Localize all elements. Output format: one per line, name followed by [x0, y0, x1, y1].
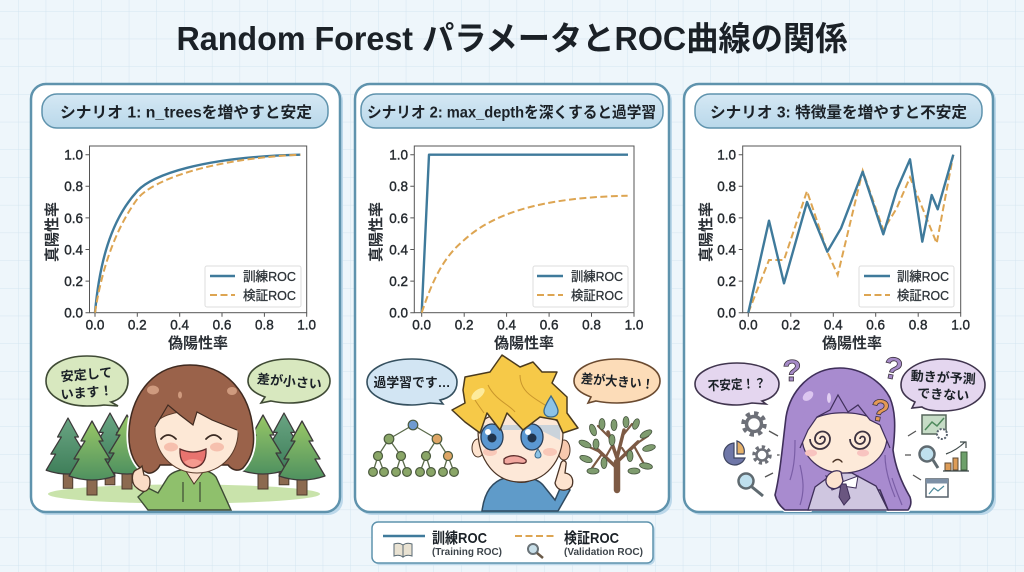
heading: scenario 2 [361, 94, 663, 128]
panel: scenario 2 [355, 84, 672, 515]
speech bubble: small gap [248, 359, 330, 403]
bottom legend: 訓練ROC [432, 530, 487, 547]
chart: scenario 1 ROC curves [43, 146, 316, 352]
chart legend [859, 266, 954, 307]
chart: scenario 1 ROC curves: 0.8 [64, 179, 83, 194]
chart: scenario 3 ROC curves: 0.2 [717, 274, 736, 289]
icon: gear large [744, 414, 764, 434]
chart: scenario 2 ROC curves: 0.8 [582, 318, 601, 332]
chart legend: 訓練ROC [243, 269, 296, 284]
chart legend: 検証ROC [243, 288, 296, 303]
chart: scenario 3 ROC curves: 0.0 [717, 306, 736, 320]
speech bubble: stable: 安定して [60, 365, 113, 384]
validation curve [422, 196, 628, 313]
chart legend [205, 266, 301, 307]
chart: scenario 1 ROC curves: 0.0 [64, 306, 83, 320]
icon: line chart with gear [922, 415, 947, 439]
character: worried blond boy [452, 355, 578, 511]
tree [69, 421, 115, 495]
chart: scenario 1 ROC curves: 0.4 [64, 242, 83, 258]
icon: sweat drop [544, 396, 558, 417]
chart legend: 訓練ROC [897, 269, 949, 284]
chart: scenario 1 ROC curves: 0.2 [128, 318, 147, 332]
speech bubble: large gap: 差が大きい！ [580, 371, 654, 392]
speech bubble: stable: います！ [60, 383, 113, 402]
speech bubble: overfitting: 過学習です… [374, 375, 450, 390]
validation curve [95, 155, 300, 313]
chart: scenario 3 ROC curves: 0.2 [781, 318, 800, 332]
chart: scenario 2 ROC curves: 0.0 [389, 306, 408, 320]
chart: scenario 3 ROC curves: 0.8 [909, 318, 928, 332]
chart: scenario 2 ROC curves: 真陽性率 [367, 202, 385, 262]
chart: scenario 1 ROC curves: 偽陽性率 [168, 334, 228, 352]
training curve [748, 155, 953, 313]
chart: scenario 3 ROC curves: 0.6 [717, 211, 736, 226]
chart: scenario 3 ROC curves: 0.4 [824, 318, 843, 332]
chart: scenario 3 ROC curves: 0.0 [739, 318, 758, 332]
character: purple-haired confused girl [775, 368, 911, 510]
chart: scenario 2 ROC curves: 0.0 [412, 318, 431, 332]
icon: magnifier [738, 474, 763, 496]
bottom legend [372, 522, 655, 565]
speech bubble: large gap [574, 359, 660, 403]
speech bubble: unpredictable: できない [917, 386, 970, 403]
tree [262, 413, 306, 485]
panel: scenario 3 [684, 84, 996, 515]
chart: scenario 2 ROC curves: 0.6 [389, 211, 408, 226]
tree [240, 415, 286, 489]
speech bubble: unstable [695, 363, 779, 405]
speech bubble: small gap: 差が小さい [256, 371, 322, 392]
chart: scenario 3 ROC curves [697, 146, 970, 352]
chart: scenario 3 ROC curves: 真陽性率 [697, 202, 715, 262]
heading: scenario 1 [42, 94, 328, 128]
chart: scenario 3 ROC curves: 0.4 [717, 242, 736, 258]
speech bubble: unpredictable: 動きが予測 [910, 368, 976, 387]
speech bubble: overfitting [367, 359, 457, 405]
bottom legend: 検証ROC [564, 530, 619, 547]
icon: magnifier [528, 544, 543, 558]
validation curve [748, 155, 953, 313]
chart legend: 検証ROC [571, 288, 623, 303]
chart: scenario 3 ROC curves: 1.0 [951, 318, 970, 332]
bottom legend: (Validation ROC) [564, 547, 643, 558]
chart: scenario 3 ROC curves: 1.0 [717, 148, 736, 162]
chart: scenario 2 ROC curves [367, 146, 643, 352]
chart: scenario 1 ROC curves: 0.6 [64, 211, 83, 226]
chart: scenario 1 ROC curves: 真陽性率 [43, 202, 61, 262]
chart: scenario 2 ROC curves: 0.6 [540, 318, 558, 332]
training curve [422, 155, 628, 313]
eye: spiral [810, 432, 830, 449]
illustration: confused girl with analytics icons [695, 349, 985, 510]
heading: scenario 3 [695, 94, 982, 128]
training curve [95, 155, 300, 313]
chart: scenario 2 ROC curves: 1.0 [625, 318, 643, 332]
chart: scenario 1 ROC curves: 0.6 [213, 318, 231, 332]
question mark orange: ? [868, 392, 892, 429]
chart: scenario 1 ROC curves: 1.0 [297, 318, 316, 332]
chart legend: 訓練ROC [571, 269, 623, 284]
illustration: overfitting boy with trees [367, 355, 660, 511]
heading: scenario 2: シナリオ 2: max_depthを深くすると過学習 [367, 102, 656, 122]
heading: scenario 3: シナリオ 3: 特徴量を増やすと不安定 [710, 102, 967, 122]
chart: scenario 2 ROC curves: 0.2 [455, 318, 474, 332]
chart: scenario 1 ROC curves: 0.0 [86, 318, 104, 332]
icon: pie chart [724, 441, 745, 465]
icon: book [394, 543, 412, 557]
speech bubble: stable [46, 356, 128, 406]
heading: scenario 1: シナリオ 1: n_treesを増やすと安定 [60, 102, 312, 122]
chart: scenario 2 ROC curves: 0.8 [389, 179, 408, 194]
icon: bar chart with arrow [943, 442, 969, 471]
icon: browser chart [926, 479, 948, 497]
chart: scenario 1 ROC curves: 0.4 [170, 318, 190, 332]
chart legend [533, 266, 628, 307]
illustration: forest and happy girl [46, 356, 330, 510]
character: happy girl in green hoodie [129, 365, 254, 510]
chart legend: 検証ROC [897, 288, 949, 303]
tree [104, 415, 150, 489]
chart: scenario 3 ROC curves: 0.6 [866, 318, 885, 332]
icon: gear small [754, 447, 770, 463]
eye: spiral [850, 432, 870, 449]
chart: scenario 2 ROC curves: 0.4 [389, 242, 408, 258]
speech bubble: unpredictable [901, 359, 985, 411]
title: Random Forest パラメータとROC曲線の関係 [176, 20, 848, 57]
panel: scenario 1 [31, 84, 343, 515]
bottom legend: (Training ROC) [432, 547, 502, 558]
chart: scenario 1 ROC curves: 1.0 [64, 148, 83, 162]
tree [46, 418, 90, 488]
chart: scenario 2 ROC curves: 0.2 [389, 274, 408, 289]
icon: magnifier [920, 446, 938, 468]
speech bubble: unstable: 不安定！？ [707, 375, 766, 394]
chart: scenario 3 ROC curves: 偽陽性率 [822, 334, 882, 352]
question mark purple: ? [880, 349, 906, 388]
question mark purple: ? [783, 353, 801, 388]
chart: scenario 1 ROC curves: 0.2 [64, 274, 83, 289]
chart: scenario 3 ROC curves: 0.8 [717, 179, 736, 194]
tree [279, 421, 325, 495]
tree [88, 413, 132, 485]
chart: scenario 2 ROC curves: 偽陽性率 [494, 334, 554, 352]
bare tree [578, 416, 656, 490]
chart: scenario 2 ROC curves: 0.4 [497, 318, 516, 332]
decision tree diagram [369, 420, 458, 476]
chart: scenario 2 ROC curves: 1.0 [389, 148, 408, 162]
chart: scenario 1 ROC curves: 0.8 [255, 318, 274, 332]
